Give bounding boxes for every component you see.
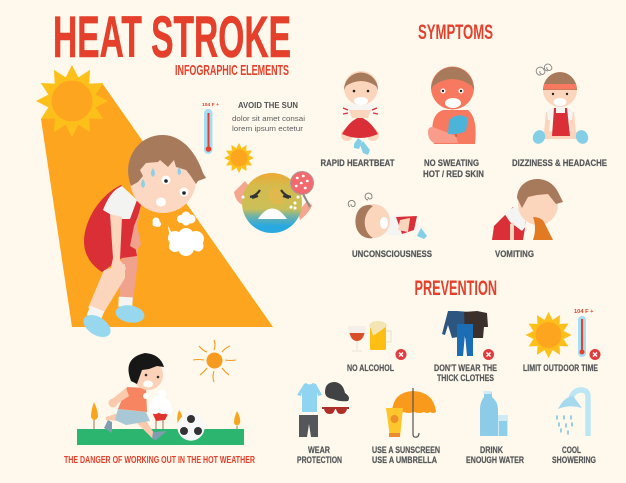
illustration: soccer in the hot weather	[77, 340, 244, 445]
near arm	[110, 214, 126, 284]
far leg	[120, 250, 138, 302]
icon: suffering earth	[234, 172, 314, 233]
red x badge	[590, 349, 600, 360]
text: avoid the sun	[232, 100, 305, 133]
symptom: unconsciousness	[348, 193, 432, 260]
near leg	[88, 264, 125, 314]
symptom: no sweating, hot red skin	[423, 66, 484, 180]
sun beam	[41, 83, 273, 327]
text: avoid the sun: lorem ipsum ectetur	[232, 124, 304, 133]
prevention: thick clothes: DON'T WEAR THE	[434, 363, 497, 374]
illustration: exhausted boy	[80, 135, 206, 342]
small red tree	[152, 412, 168, 421]
running boy	[104, 353, 172, 440]
icon: sun with wavy rays	[193, 340, 236, 382]
heading: prevention: PREVENTION	[414, 277, 497, 300]
prevention: limit outdoor time: LIMIT OUTDOOR TIME	[523, 363, 598, 374]
prevention: drink water: ENOUGH WATER	[466, 455, 524, 466]
icon: thermometer	[202, 102, 219, 154]
heading: symptoms: SYMPTOMS	[418, 21, 493, 44]
symptom: no sweating, hot red skin: HOT / RED SKIN	[423, 169, 484, 180]
caption: danger of working out: THE DANGER OF WORKING OUT IN THE HOT WEATHER	[64, 454, 255, 466]
prevention: drink water: DRINK	[480, 445, 503, 456]
title: HEAT STROKE	[53, 5, 291, 70]
prevention: limit outdoor time	[523, 309, 600, 374]
symptom: rapid heartbeat: RAPID HEARTBEAT	[320, 158, 395, 169]
prevention: sunscreen and umbrella: USE A UMBRELLA	[372, 455, 437, 466]
prevention: limit outdoor time: 104 F +	[574, 309, 594, 315]
hair	[128, 135, 206, 186]
red overalls	[84, 185, 141, 272]
symptom: unconsciousness: UNCONSCIOUSNESS	[352, 249, 432, 260]
icon: thermometer: 104 F +	[202, 102, 219, 107]
symptom: rapid heartbeat	[320, 71, 395, 169]
prevention: cool shower: COOL	[562, 445, 581, 456]
prevention: wear protection: PROTECTION	[297, 455, 342, 466]
prevention: wear protection: WEAR	[308, 445, 330, 456]
prevention: thick clothes: THICK CLOTHES	[437, 373, 494, 384]
breath puffs	[152, 212, 204, 256]
symptom: no sweating, hot red skin: NO SWEATING	[424, 158, 479, 169]
white sleeve	[103, 186, 137, 219]
prevention: sunscreen and umbrella	[372, 388, 440, 466]
symptom: dizziness and headache	[512, 64, 607, 169]
symptom: dizziness and headache: DIZZINESS & HEADACHE	[512, 158, 607, 169]
subtitle: INFOGRAPHIC ELEMENTS	[175, 62, 289, 79]
mouth	[156, 198, 166, 206]
prevention: no alcohol: NO ALCOHOL	[347, 363, 394, 374]
red x badge	[483, 349, 494, 360]
hand fan	[290, 172, 314, 194]
icon: big sun	[36, 65, 108, 137]
far arm	[130, 208, 141, 250]
red x badge	[396, 349, 406, 360]
soccer ball	[177, 413, 205, 441]
eyes	[162, 176, 170, 184]
prevention: cool shower	[552, 390, 596, 466]
prevention: sunscreen and umbrella: USE A SUNSCREEN	[372, 445, 440, 456]
symptom: vomiting: VOMITING	[495, 249, 534, 260]
sweat drops	[141, 167, 181, 188]
prevention: no alcohol	[347, 321, 406, 374]
prevention: drink water	[466, 391, 524, 466]
prevention: wear protection	[297, 382, 349, 466]
symptom: vomiting	[492, 179, 563, 260]
text: avoid the sun: AVOID THE SUN	[238, 100, 298, 110]
prevention: thick clothes	[434, 311, 497, 384]
trees	[91, 402, 240, 426]
icon: small sun	[224, 143, 254, 173]
prevention: cool shower: SHOWERING	[552, 455, 596, 466]
text: avoid the sun: dolor sit amet consai	[232, 114, 305, 123]
face	[130, 147, 196, 213]
grass	[77, 429, 244, 445]
